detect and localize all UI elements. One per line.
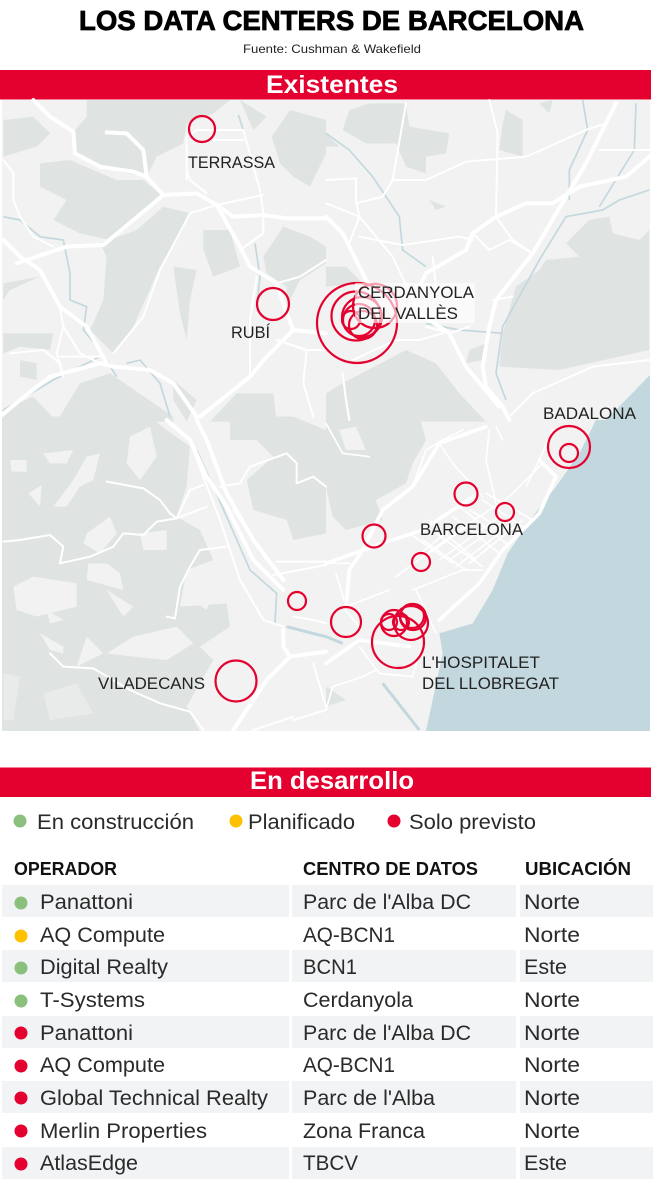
markers: Badalona bbox=[548, 426, 590, 468]
row: AQ Compute: Norte bbox=[524, 1054, 580, 1077]
map of Barcelona data centers bbox=[0, 100, 650, 731]
label: Terrassa: TERRASSA bbox=[188, 153, 276, 172]
table header: OPERADOR bbox=[14, 859, 117, 879]
source: Fuente: Cushman & Wakefield bbox=[243, 42, 421, 56]
row: AQ Compute: AQ Compute bbox=[40, 924, 165, 947]
row: T-Systems: Norte bbox=[524, 989, 580, 1012]
title: LOS DATA CENTERS DE BARCELONA bbox=[79, 5, 584, 36]
label: L'Hospitalet del Llobregat: DEL LLOBREGAT bbox=[422, 674, 559, 693]
legend bbox=[14, 811, 536, 834]
row: AQ Compute: AQ-BCN1 bbox=[303, 1054, 395, 1077]
table header: UBICACIÓN bbox=[525, 858, 631, 879]
row: Panattoni: Norte bbox=[524, 1022, 580, 1045]
row: Merlin Properties: Zona Franca bbox=[303, 1120, 425, 1143]
table bbox=[2, 858, 653, 1179]
label: Viladecans: VILADECANS bbox=[98, 674, 205, 693]
row: AQ Compute: AQ-BCN1 bbox=[303, 924, 395, 947]
row: Panattoni: Parc de l'Alba DC bbox=[303, 891, 471, 914]
row: Panattoni: Parc de l'Alba DC bbox=[303, 1022, 471, 1045]
row: Global Technical Realty bbox=[2, 1081, 653, 1113]
heading: En desarrollo: En desarrollo bbox=[250, 767, 414, 795]
markers: Viladecans bbox=[216, 660, 256, 702]
row: AtlasEdge: TBCV bbox=[303, 1152, 358, 1175]
markers: L'Hospitalet bbox=[331, 604, 428, 668]
legend: Solo previsto bbox=[409, 811, 536, 834]
row: T-Systems bbox=[14, 989, 580, 1012]
row: AQ Compute bbox=[14, 1054, 580, 1077]
table header: CENTRO DE DATOS bbox=[303, 859, 478, 879]
roads bbox=[0, 100, 649, 730]
markers: Cerdanyola del Vallès bbox=[317, 283, 397, 363]
heading: Existentes: Existentes bbox=[266, 71, 398, 99]
markers: Rubí bbox=[257, 288, 289, 320]
label: Badalona: BADALONA bbox=[543, 404, 637, 423]
marker: small western site bbox=[288, 592, 306, 610]
row: Panattoni bbox=[2, 885, 653, 917]
label: L'Hospitalet del Llobregat bbox=[422, 653, 559, 693]
row: T-Systems: T-Systems bbox=[40, 989, 145, 1012]
row: Panattoni: Panattoni bbox=[40, 891, 133, 914]
row: AQ Compute: Norte bbox=[524, 924, 580, 947]
row: Digital Realty: Este bbox=[524, 956, 567, 979]
row: Global Technical Realty: Norte bbox=[524, 1087, 580, 1110]
row: AQ Compute bbox=[14, 924, 580, 947]
rivers bbox=[3, 100, 649, 730]
label: Barcelona: BARCELONA bbox=[420, 520, 524, 539]
row: Panattoni: Norte bbox=[524, 891, 580, 914]
row: Panattoni bbox=[2, 1016, 653, 1048]
row: Merlin Properties: Merlin Properties bbox=[40, 1120, 207, 1143]
label: Cerdanyola del Vallès: DEL VALLÈS bbox=[358, 304, 458, 323]
heading: Existentes bbox=[0, 70, 651, 100]
row: Merlin Properties: Norte bbox=[524, 1120, 580, 1143]
row: Merlin Properties bbox=[14, 1120, 580, 1143]
label: Cerdanyola del Vallès bbox=[355, 283, 475, 323]
label: Rubí: RUBÍ bbox=[231, 323, 270, 342]
table header bbox=[14, 858, 631, 879]
row: Global Technical Realty: Parc de l'Alba bbox=[303, 1087, 435, 1110]
legend: En construcción bbox=[37, 811, 194, 834]
legend: Planificado bbox=[248, 811, 355, 834]
row: Digital Realty bbox=[2, 950, 653, 982]
row: AtlasEdge: Este bbox=[524, 1152, 567, 1175]
markers: Barcelona bbox=[362, 482, 514, 571]
coastline at upper right bbox=[596, 375, 650, 420]
heading: En desarrollo bbox=[0, 767, 651, 797]
row: AtlasEdge: AtlasEdge bbox=[40, 1152, 138, 1175]
row: AtlasEdge bbox=[2, 1147, 653, 1179]
row: Digital Realty: BCN1 bbox=[303, 956, 357, 979]
row: Global Technical Realty: Global Technical Realty bbox=[40, 1087, 269, 1110]
label: L'Hospitalet del Llobregat: L'HOSPITALET bbox=[422, 653, 540, 672]
row: AQ Compute: AQ Compute bbox=[40, 1054, 165, 1077]
markers: Terrassa bbox=[189, 116, 215, 142]
label: Cerdanyola del Vallès: CERDANYOLA bbox=[358, 283, 475, 302]
row: Panattoni: Panattoni bbox=[40, 1022, 133, 1045]
row: Digital Realty: Digital Realty bbox=[40, 956, 169, 979]
row: T-Systems: Cerdanyola bbox=[303, 989, 413, 1012]
